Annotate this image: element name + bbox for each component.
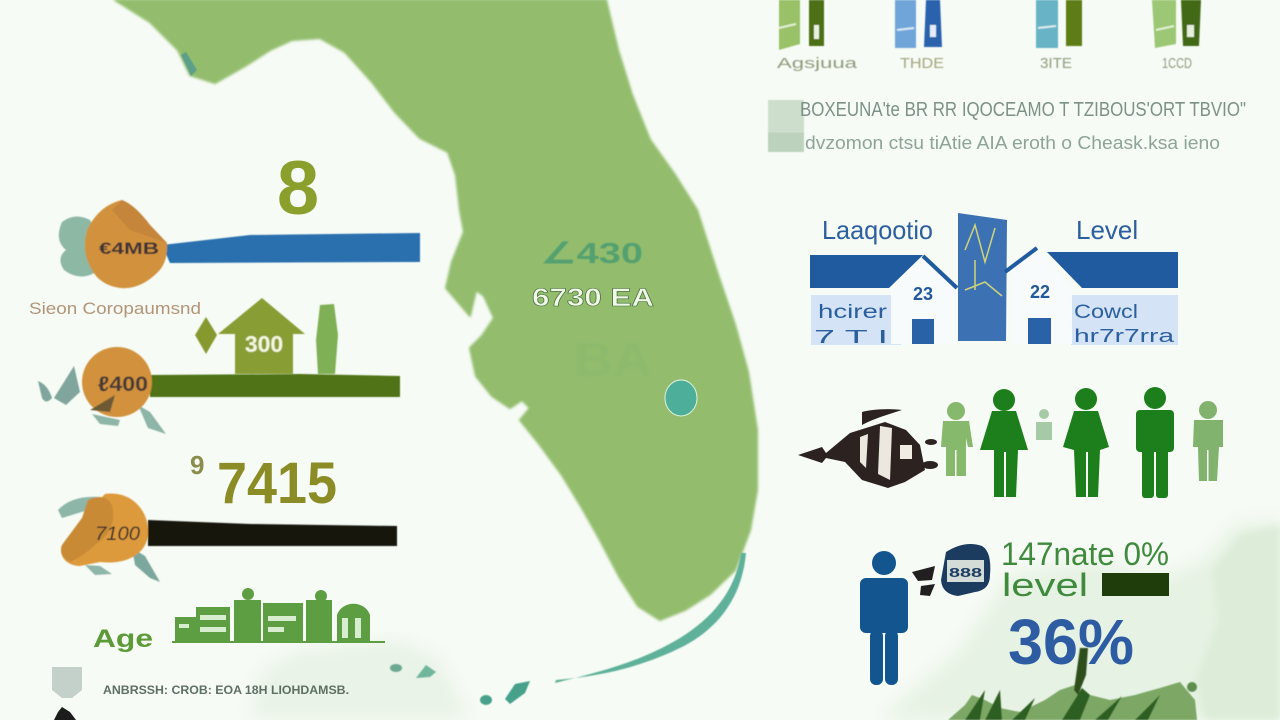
map of Florida (115, 0, 757, 620)
tree (316, 304, 338, 374)
top right text block: dvzomon ctsu tiAtie AIA eroth o Cheask.ksa ieno (805, 133, 1220, 153)
top right text block (768, 99, 1246, 153)
stat: 7415: 7415 (217, 451, 337, 516)
light side panels (811, 295, 901, 345)
bottom left icon (52, 667, 82, 720)
map label: main: 6730 EA (532, 284, 654, 312)
climate level text: level (1002, 567, 1088, 603)
row 2: house icon (195, 298, 338, 374)
age label: Age (93, 625, 153, 653)
top icons row (777, 0, 1201, 72)
fruit value: €4MB (99, 239, 159, 258)
blue person icon (860, 551, 908, 685)
man (1136, 387, 1174, 498)
row 3: fruit and black bar (58, 493, 397, 582)
small person 2 (1193, 401, 1223, 481)
houses panel (810, 213, 1178, 347)
panel label right: Cowcl (1074, 302, 1138, 323)
fish icon (798, 409, 938, 488)
fruit value: 7100 (95, 524, 140, 545)
map marker: lake (665, 380, 697, 416)
icon column 2 (895, 0, 944, 72)
caption: row 1: Sieon Coropaumsnd (29, 299, 201, 318)
small person 1 (941, 402, 973, 476)
icon column 3: 3ITE (1040, 55, 1072, 72)
map label: top: ∠430 (541, 238, 643, 270)
leaves (59, 216, 100, 277)
house right (1012, 248, 1072, 344)
houses panel: 22 (1030, 282, 1050, 302)
row 2: fruit and green bar (38, 347, 400, 434)
map label: faint: BA (574, 334, 652, 387)
doors (912, 319, 934, 344)
icon column 2: THDE (900, 55, 944, 72)
icon column 3 (1036, 0, 1082, 72)
center tower (958, 213, 1007, 341)
climate level text (1001, 536, 1169, 603)
level bar (1102, 573, 1169, 596)
monitor icon (912, 544, 990, 596)
monitor icon: 888 (949, 565, 982, 580)
icon column 4: 1CCD (1162, 55, 1192, 72)
row 1: fruit icon and blue bar (59, 200, 420, 288)
skyline icon (172, 588, 385, 643)
faint child (1036, 409, 1052, 440)
block marks (768, 100, 804, 132)
florida keys (390, 553, 746, 705)
roof bars (810, 255, 923, 288)
arrow (195, 317, 217, 354)
icon column 4 (1152, 0, 1201, 72)
panel label left: hcirer (818, 302, 888, 323)
plant illustration (948, 648, 1197, 720)
window labels: 23 (913, 284, 933, 304)
blue bar (162, 233, 420, 263)
gulf bay mark (181, 52, 197, 76)
stat: 8: 8 (277, 146, 319, 231)
woman 1 (980, 389, 1028, 497)
icon column 1 (777, 0, 858, 72)
houses panel: 7 T I (814, 327, 888, 347)
house (218, 298, 305, 374)
icon column 1: Agsjuua (777, 55, 858, 72)
people row (941, 387, 1223, 498)
stat: 36%: 36% (1008, 606, 1134, 678)
houses panel: hr7r7rra (1074, 326, 1176, 346)
climate level text: 147nate 0% (1001, 536, 1169, 572)
small mark: 9 (190, 450, 204, 480)
bottom left caption: ANBRSSH: CROB: EOA 18H LIOHDAMSB. (103, 685, 349, 697)
fruit value: ℓ400 (98, 373, 148, 396)
orange fruit (85, 200, 167, 288)
woman 2 (1063, 388, 1109, 497)
heading right: Level (1076, 215, 1138, 245)
house value: 300 (245, 331, 283, 357)
house left (891, 256, 957, 344)
heading left: Laaqootio (822, 215, 933, 245)
